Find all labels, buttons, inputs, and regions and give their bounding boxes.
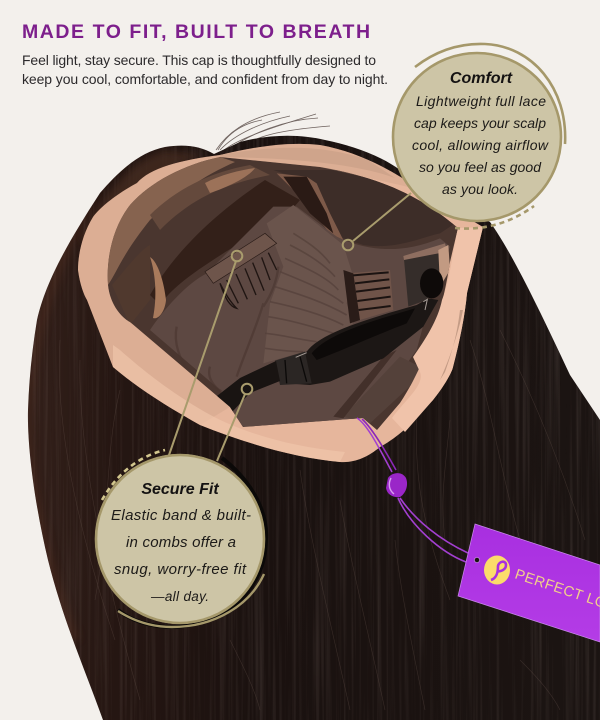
- cap fold shadows: [176, 267, 278, 392]
- leader: combs: [168, 251, 242, 458]
- comfort dashed arc: [455, 206, 534, 229]
- hair mass: [28, 136, 600, 720]
- leader: comfort: [343, 193, 411, 250]
- secure fit body: —all day.: [150, 589, 209, 604]
- callout: comfort: [392, 44, 565, 229]
- callout leader lines: [168, 193, 411, 461]
- secure fit body: [111, 507, 251, 604]
- callout: secure fit: [95, 450, 266, 627]
- comfort body: as you look.: [442, 181, 518, 197]
- secure fit body: snug, worry-free fit: [114, 561, 247, 578]
- intro text: Feel light, stay secure. This cap is thoughtfully designed to: [22, 52, 376, 68]
- comfort body: [412, 93, 549, 197]
- velcro patch: [404, 253, 440, 307]
- secure fit dashed arc: [102, 450, 165, 500]
- woven ribs: [265, 233, 347, 352]
- lace cap: [78, 144, 483, 462]
- mesh shadow areas: [108, 157, 235, 285]
- leader: elastic band: [217, 384, 252, 461]
- lace outer band: [78, 144, 483, 462]
- lace right fold: [392, 227, 483, 432]
- secure fit body: in combs offer a: [126, 534, 236, 551]
- cap top dark: [273, 170, 460, 246]
- comfort heading: Comfort: [450, 70, 513, 87]
- comb teeth left: [220, 253, 277, 308]
- comfort body: Lightweight full lace: [416, 93, 546, 109]
- secure fit body: Elastic band & built-: [111, 507, 251, 524]
- tag logo: [484, 556, 510, 584]
- comfort circle: [392, 52, 562, 222]
- intro text: keep you cool, comfortable, and confident from day to night.: [22, 71, 388, 87]
- title: MADE TO FIT, BUILT TO BREATH: [22, 21, 372, 43]
- tag hole: [474, 557, 480, 563]
- cord bead: [386, 473, 407, 497]
- comb right: [353, 270, 394, 320]
- cap interior: [108, 157, 458, 430]
- brand tag: [458, 524, 600, 642]
- comfort outer arc: [415, 44, 565, 144]
- comfort body: cool, allowing airflow: [412, 137, 549, 153]
- comfort body: cap keeps your scalp: [414, 115, 546, 131]
- lower fold: [343, 357, 420, 423]
- hair highlights: [59, 330, 585, 710]
- elastic band: [297, 298, 438, 385]
- secure fit circle: [95, 454, 265, 624]
- stray hair tuft: [216, 112, 330, 150]
- comfort body: so you feel as good: [419, 159, 542, 175]
- secure fit heading: Secure Fit: [141, 481, 219, 498]
- secure fit outer arc: [118, 458, 266, 627]
- intro text: [22, 52, 388, 87]
- lace mesh texture: [78, 144, 420, 425]
- lower cap: [150, 207, 450, 427]
- hair strand texture: [34, 136, 600, 720]
- comb flap left: [205, 233, 277, 283]
- purple tag cord: [357, 418, 468, 562]
- elastic strap left: [217, 361, 280, 412]
